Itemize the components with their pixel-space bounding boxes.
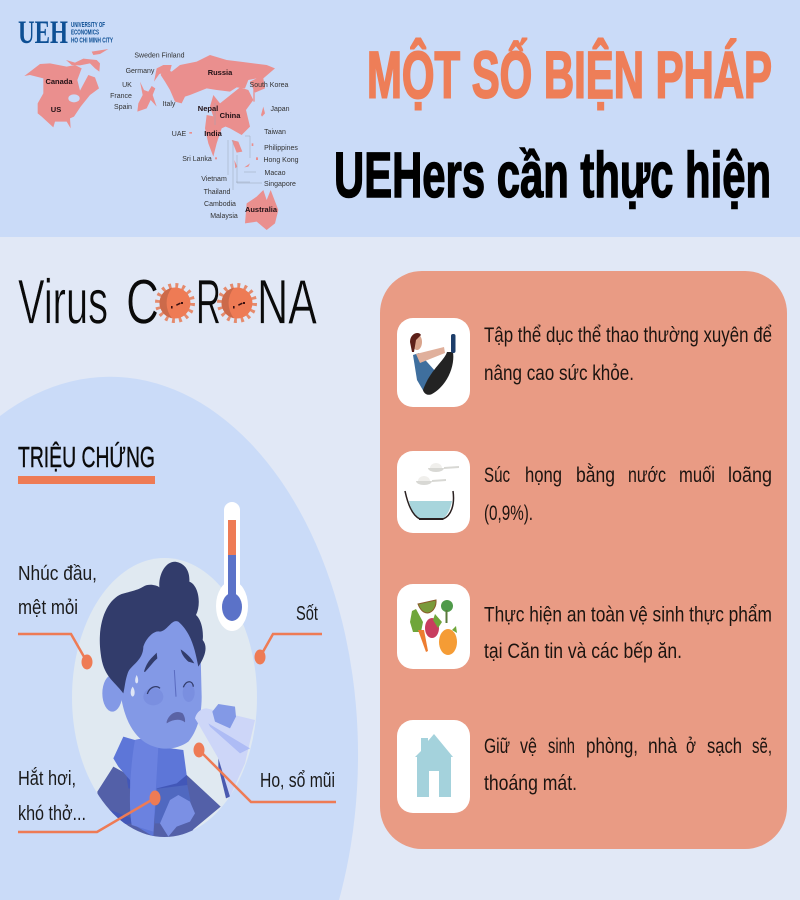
callout: Nhúc đầu, mệt mỏi: Nhúc đầu, (18, 563, 97, 585)
callout: Sốt (254, 603, 322, 664)
country names: Canada (45, 77, 73, 86)
country names: Sweden (134, 52, 160, 60)
world map with affected countries (24, 49, 299, 230)
country names: Thailand (204, 189, 231, 196)
country names: China (220, 111, 241, 120)
text: ở (686, 735, 696, 758)
country names: Russia (208, 68, 233, 77)
icon: fruit and vegetables (397, 584, 470, 669)
heading: Virus CORONA: C (126, 268, 159, 338)
measure 4: clean home (397, 720, 772, 813)
measure 1: exercise (397, 318, 772, 407)
title (334, 38, 772, 211)
text: Giữ (484, 735, 510, 758)
callout: Hắt hơi, khó thở: Hắt hơi, (18, 767, 76, 790)
panel: measures (380, 271, 787, 849)
country names: Philippines (264, 145, 298, 152)
callout: Nhúc đầu, mệt mỏi (18, 563, 97, 670)
country names: France (110, 93, 132, 100)
callout: Hắt hơi, khó thở (18, 767, 160, 832)
text: muối (679, 464, 715, 487)
heading: Virus CORONA: R (196, 268, 221, 338)
text: vệ (520, 735, 537, 758)
text: nhà (648, 735, 677, 758)
callout: Ho, sổ mũi: Ho, sổ mũi (260, 770, 335, 792)
country names: Japan (270, 106, 290, 113)
text: họng (525, 464, 562, 487)
measure 2: salt water: (0,9%). (484, 502, 533, 525)
callout: Sốt: Sốt (296, 603, 318, 625)
icon: person exercising (397, 318, 470, 407)
map shapes (24, 49, 278, 230)
logo: UEH: UNIVERSITY OF (71, 22, 105, 29)
text: loãng (728, 464, 772, 487)
country names: Germany (126, 68, 155, 75)
country names: Australia (245, 205, 278, 214)
text (484, 464, 772, 487)
oval backdrop (72, 558, 257, 837)
country names (45, 52, 299, 220)
measure 2: salt water (397, 451, 772, 533)
leader lines (215, 103, 262, 190)
heading: Virus CORONA: Virus (18, 268, 108, 338)
country names: Spain (114, 104, 132, 111)
country names: Sri Lanka (182, 156, 212, 163)
text: sẽ, (752, 735, 772, 758)
panel: symptoms background (0, 377, 358, 900)
heading: Triệu chứng (18, 441, 155, 484)
icon: thermometer (216, 502, 248, 631)
figure (97, 562, 255, 840)
country names: South Korea (250, 82, 289, 89)
callout: Ho, sổ mũi (194, 742, 336, 802)
icon: house (397, 720, 470, 813)
heading: Triệu chứng: TRIỆU CHỨNG (18, 441, 155, 474)
header band (0, 0, 800, 237)
country names: Italy (163, 101, 176, 108)
country names: Macao (264, 170, 286, 177)
illustration: sick man (72, 558, 257, 840)
country names: Finland (162, 52, 185, 60)
country names: Singapore (264, 181, 296, 188)
country names: India (204, 129, 223, 138)
country names: US (51, 105, 61, 114)
country names: UK (122, 82, 132, 89)
text: bằng (576, 464, 615, 487)
country names: Malaysia (210, 213, 238, 220)
icon: virus character 2 (221, 287, 253, 319)
measure 4: clean home: thoáng mát. (484, 772, 577, 795)
country names: UAE (172, 131, 187, 138)
country names: Hong Kong (263, 157, 299, 164)
heading: Virus CORONA: NA (257, 268, 317, 338)
text: phòng, (586, 735, 638, 758)
text: sạch (707, 735, 742, 758)
logo: UEH: HO CHI MINH CITY (71, 38, 113, 44)
icon: bowl and spoons (397, 451, 470, 533)
country names: Taiwan (264, 129, 286, 136)
text: Súc (484, 464, 510, 487)
callout: Nhúc đầu, mệt mỏi: mệt mỏi (18, 597, 78, 619)
measure 3: food safety (397, 584, 772, 669)
country names: Nepal (198, 104, 218, 113)
text (484, 735, 772, 758)
callout: Hắt hơi, khó thở: khó thở... (18, 803, 86, 825)
logo: UEH: UEH (18, 15, 68, 51)
country names: Vietnam (201, 176, 227, 183)
text: nước (628, 464, 666, 487)
text: sinh (548, 735, 575, 758)
logo: UEH: ECONOMICS (71, 30, 99, 36)
icon: virus character 1 (159, 287, 191, 319)
heading: Virus CORONA (18, 268, 317, 338)
measure 3: food safety: tại Căn tin và các bếp ăn. (484, 640, 682, 663)
country names: Cambodia (204, 201, 236, 208)
measure 1: exercise: nâng cao sức khỏe. (484, 362, 634, 385)
